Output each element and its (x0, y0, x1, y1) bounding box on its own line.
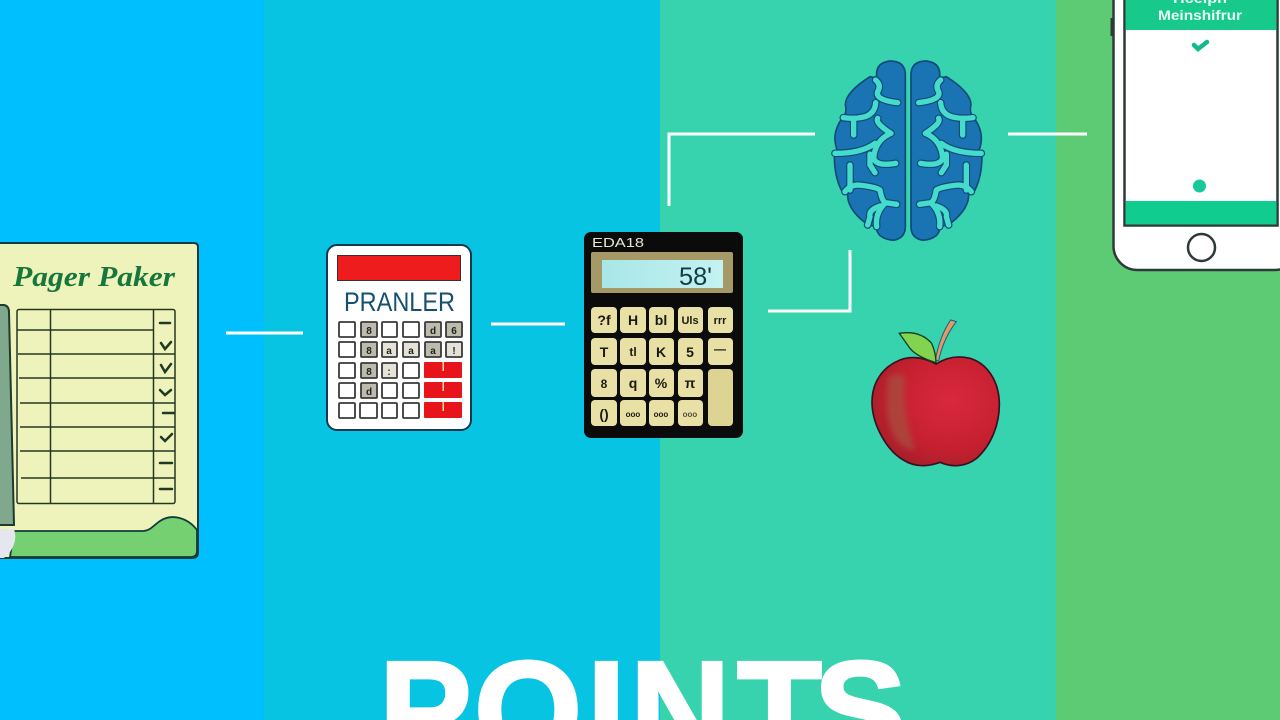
key glyphs: bl (655, 312, 667, 328)
key glyphs: ?f (597, 312, 611, 328)
pencil (0, 305, 14, 525)
key glyphs: 8 (366, 346, 372, 357)
arrow: black calculator up to brain (768, 250, 850, 311)
icon: smartphone (1112, 0, 1280, 270)
phone dot (1193, 180, 1206, 192)
display (591, 252, 733, 293)
brain right hemisphere (911, 61, 982, 240)
icon: apple (872, 320, 999, 466)
calculator red keys (424, 362, 462, 418)
keys (591, 307, 733, 426)
key glyphs: 8 (366, 326, 372, 337)
key glyphs: H (628, 312, 638, 328)
key glyphs: q (629, 375, 637, 391)
key glyphs: 5 (686, 344, 694, 360)
phone screen (1124, 0, 1278, 226)
key glyphs: d (430, 326, 436, 337)
key glyphs: 8 (366, 367, 372, 378)
key glyphs: a (408, 346, 414, 357)
key glyphs: () (599, 406, 609, 422)
arrow: white calculator to black calculator (491, 322, 565, 326)
apple leaf (899, 333, 936, 363)
calculator label: PRANLER (344, 287, 455, 317)
key glyphs: K (656, 344, 666, 360)
phone side button (1110, 18, 1114, 36)
phone home button (1188, 234, 1215, 261)
key glyphs (366, 326, 457, 398)
display number: 58' (679, 263, 712, 291)
calculator brand: EDA18 (592, 235, 644, 250)
key glyphs: a (430, 346, 436, 357)
paper title: Pager Paker (12, 261, 176, 293)
icon: white calculator (327, 245, 471, 430)
phone header (1126, 0, 1276, 30)
red display (338, 256, 460, 280)
phone header text: Meinshifrur (1158, 7, 1243, 23)
apple shaded side (887, 374, 915, 450)
key glyphs: — (714, 342, 726, 356)
key glyphs: rrr (714, 315, 727, 327)
arrow: connector to brain top (669, 134, 815, 206)
icon: black calculator (584, 232, 743, 438)
key glyphs: ooo (654, 410, 668, 419)
key glyphs: Uls (681, 315, 699, 327)
key glyphs: 6 (451, 326, 457, 337)
calculator keys (339, 322, 462, 418)
key glyphs: ooo (683, 410, 697, 419)
phone header text (1158, 0, 1243, 23)
arrow: paper to calculator (226, 332, 303, 334)
arrow: brain to phone (1008, 132, 1087, 136)
key glyphs (597, 312, 727, 422)
key glyphs: % (655, 375, 668, 391)
key glyphs: d (366, 387, 372, 398)
icon: paper checklist (0, 243, 198, 558)
key glyphs: 8 (601, 377, 608, 391)
icon: brain (834, 61, 982, 240)
phone footer band (1126, 201, 1276, 224)
brain left hemisphere (834, 61, 905, 240)
paper green footer (10, 517, 197, 557)
paper table (17, 309, 175, 504)
key glyphs: tl (629, 345, 637, 359)
key glyphs: π (685, 375, 696, 391)
key glyphs: T (600, 344, 609, 360)
phone check mark (1194, 42, 1207, 49)
key glyphs: ooo (626, 410, 640, 419)
key glyphs: : (387, 367, 391, 378)
apple stem (935, 320, 956, 361)
table check marks (160, 323, 174, 489)
key glyphs: ! (452, 346, 456, 357)
key glyphs: a (386, 346, 392, 357)
